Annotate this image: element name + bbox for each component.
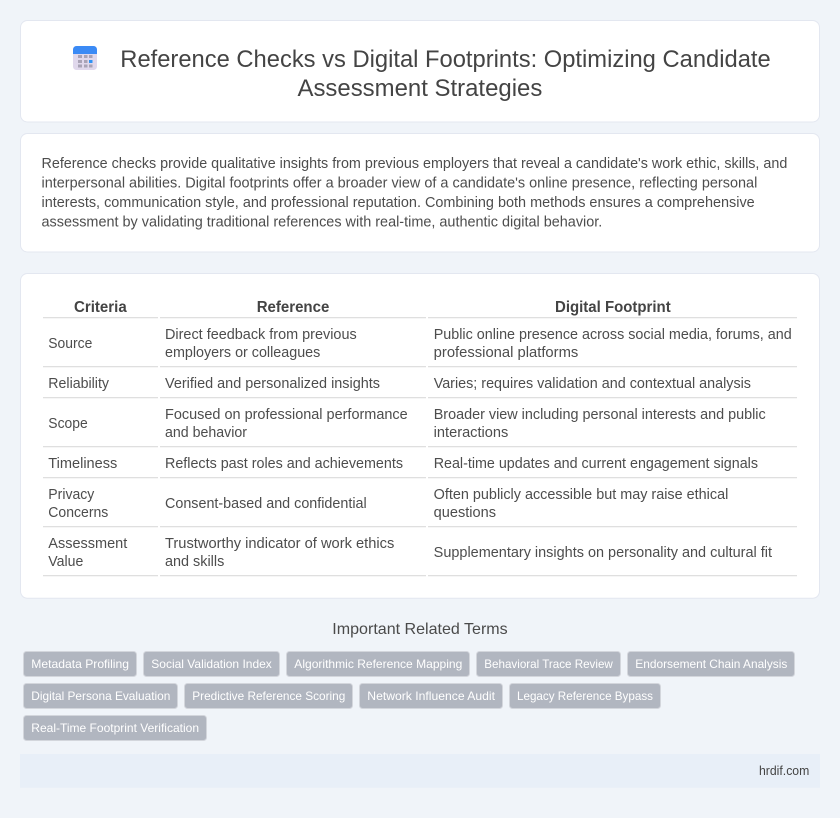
row: source: Public online presence across social media, forums, and <box>434 327 792 343</box>
table header: Digital Footprint <box>555 299 671 316</box>
tags: related terms <box>24 652 794 740</box>
row: reliability: Reliability <box>48 376 110 392</box>
tag: Endorsement Chain Analysis <box>635 657 787 671</box>
row: privacy concerns: Often publicly accessible but may raise ethical <box>434 487 728 503</box>
tag <box>24 684 178 708</box>
row: timeliness <box>48 456 758 472</box>
row: timeliness: Timeliness <box>48 456 117 472</box>
tag <box>510 684 660 708</box>
tag <box>24 716 206 740</box>
text block: summary: interests, communication style, and professional reputation. Combining both methods ensures a comprehensive <box>42 195 755 211</box>
row: source: employers or colleagues <box>165 345 320 361</box>
title: Assessment Strategies <box>298 75 542 102</box>
row: scope: interactions <box>434 425 508 441</box>
row: privacy concerns: Consent-based and confidential <box>165 496 367 512</box>
row: timeliness: Reflects past roles and achievements <box>165 456 403 472</box>
text block: summary: assessment by validating traditional references with real-time, authentic digital behavior. <box>42 214 602 230</box>
row: reliability <box>48 376 751 392</box>
footer: hrdif.com <box>759 763 809 778</box>
table header: Reference <box>257 299 329 316</box>
text block: summary <box>42 156 787 230</box>
row: scope: Scope <box>48 416 88 432</box>
heading: related terms: Important Related Terms <box>332 621 508 638</box>
tag: Real-Time Footprint Verification <box>31 721 199 735</box>
table header: Criteria <box>74 299 127 316</box>
row: privacy concerns: Concerns <box>48 505 108 521</box>
tag <box>286 652 470 676</box>
row: assessment value: Trustworthy indicator of work ethics <box>165 536 394 552</box>
tag <box>184 684 352 708</box>
tag: Social Validation Index <box>151 657 272 671</box>
footer <box>20 754 820 788</box>
row: source: Source <box>48 336 92 352</box>
row: timeliness: Real-time updates and current engagement signals <box>434 456 758 472</box>
row: assessment value: and skills <box>165 554 224 570</box>
tag <box>628 652 794 676</box>
row: source: professional platforms <box>434 345 578 361</box>
row: assessment value <box>48 536 772 570</box>
tag <box>144 652 280 676</box>
row: reliability: Verified and personalized insights <box>165 376 380 392</box>
row: scope: Broader view including personal interests and public <box>434 407 766 423</box>
row: assessment value: Value <box>48 554 83 570</box>
text block: summary: interpersonal abilities. Digital footprints offer a broader view of a candidate's online presence, reflecting personal <box>42 176 757 192</box>
row: assessment value: Supplementary insights on personality and cultural fit <box>434 545 772 561</box>
row: reliability: Varies; requires validation and contextual analysis <box>434 376 751 392</box>
tag <box>476 652 620 676</box>
tag: Algorithmic Reference Mapping <box>294 657 462 671</box>
row: scope: and behavior <box>165 425 247 441</box>
title: Reference Checks vs Digital Footprints: Optimizing Candidate <box>120 46 771 73</box>
row: source <box>48 327 792 361</box>
tag: Network Influence Audit <box>367 689 496 703</box>
row: privacy concerns <box>48 487 728 521</box>
tag <box>24 652 136 676</box>
row: privacy concerns: questions <box>434 505 496 521</box>
tag <box>360 684 502 708</box>
panel: header <box>20 20 820 122</box>
title <box>120 46 771 102</box>
panel: comparison table <box>20 274 820 598</box>
row: scope: Focused on professional performance <box>165 407 408 423</box>
text block: summary: Reference checks provide qualitative insights from previous employers that reveal a candidate's work ethic, skills, and <box>42 156 787 172</box>
tag: Digital Persona Evaluation <box>31 689 170 703</box>
icon: calendar <box>73 46 97 70</box>
tag: Behavioral Trace Review <box>484 657 613 671</box>
tag: Predictive Reference Scoring <box>192 689 345 703</box>
row: scope <box>48 407 766 441</box>
row: source: Direct feedback from previous <box>165 327 357 343</box>
tag: Metadata Profiling <box>31 657 129 671</box>
tag: Legacy Reference Bypass <box>517 689 653 703</box>
row: privacy concerns: Privacy <box>48 487 95 503</box>
panel: summary paragraph <box>20 134 820 252</box>
table header <box>74 299 671 316</box>
row: assessment value: Assessment <box>48 536 127 552</box>
